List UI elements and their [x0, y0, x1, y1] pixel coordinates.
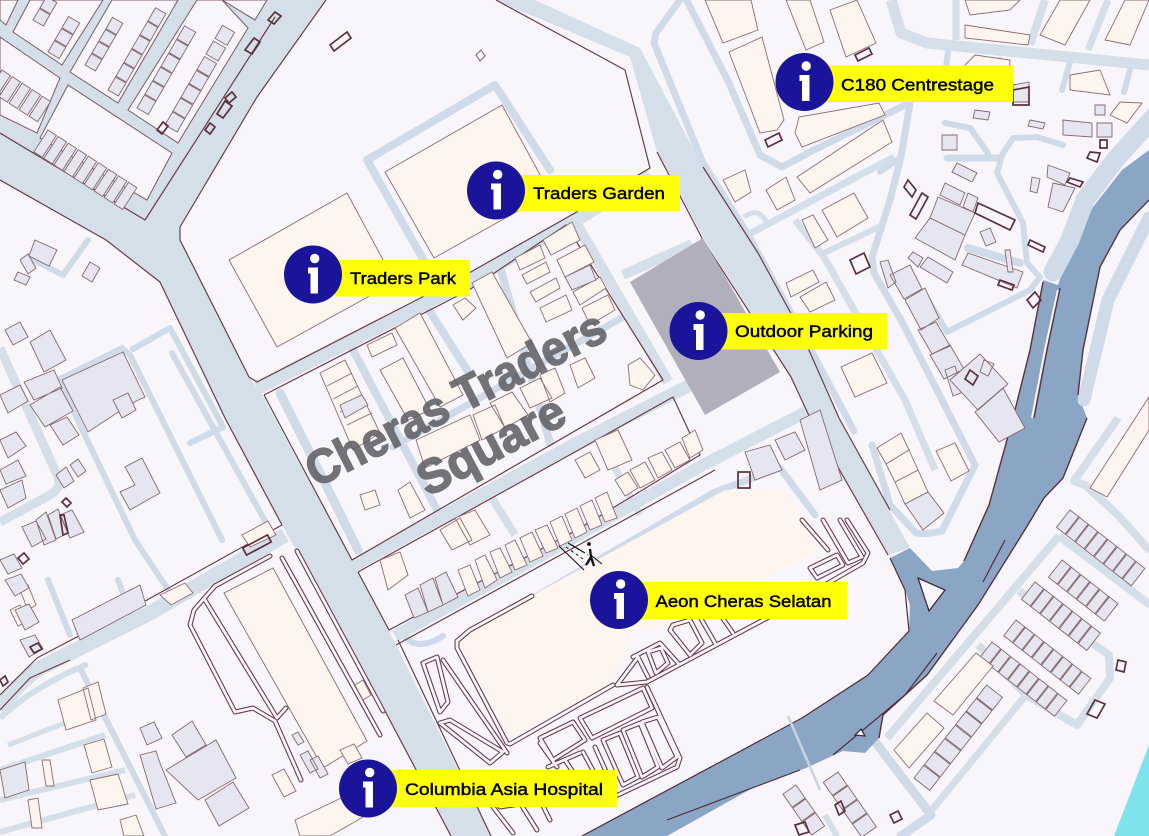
upper left houses: [0, 0, 485, 210]
marker: C180 Centrestage: C180 Centrestage: [841, 76, 994, 94]
marker: Traders Garden: Traders Garden: [533, 184, 665, 203]
Outdoor Parking lot: [630, 238, 780, 415]
Traders Park building: [229, 193, 395, 347]
marker: Outdoor Parking: Outdoor Parking: [735, 322, 873, 341]
marker: Outdoor Parking: [670, 302, 887, 360]
major roads: [0, 0, 910, 836]
Traders Garden building: [385, 105, 550, 258]
marker: Columbia Asia Hospital: Columbia Asia Hospital: [405, 780, 603, 799]
west side: [58, 348, 222, 540]
marker: Aeon Cheras Selatan: [590, 571, 847, 629]
road edges: [0, 0, 650, 382]
marker: Traders Park: Traders Park: [350, 269, 457, 288]
highway side ramps: [582, 108, 1149, 836]
marker: Traders Garden: [467, 162, 680, 220]
river: [1114, 745, 1149, 836]
highway: [582, 150, 1149, 836]
title: Cheras Traders Square: Square: [408, 385, 574, 507]
north west white blocks: [0, 0, 267, 200]
marker: C180 Centrestage: [776, 53, 1013, 111]
north east: [891, 0, 1149, 65]
Aeon mall building: [458, 488, 818, 737]
south east houses: [783, 510, 1145, 836]
marker: Aeon Cheras Selatan: Aeon Cheras Selatan: [656, 592, 832, 611]
south block houses: [380, 410, 842, 618]
north west road field: [0, 0, 290, 222]
north east buildings: [705, 0, 1149, 530]
pedestrian icon: [559, 542, 602, 570]
title: Cheras Traders Square: Cheras Traders: [297, 301, 615, 498]
central block buildings: [320, 222, 655, 518]
marker: Traders Park: [284, 246, 470, 304]
west big building: [224, 568, 367, 768]
south east: [1074, 418, 1149, 551]
marker: Columbia Asia Hospital: [339, 760, 617, 818]
parking lot outlines: [190, 520, 868, 833]
west houses: [0, 240, 410, 836]
